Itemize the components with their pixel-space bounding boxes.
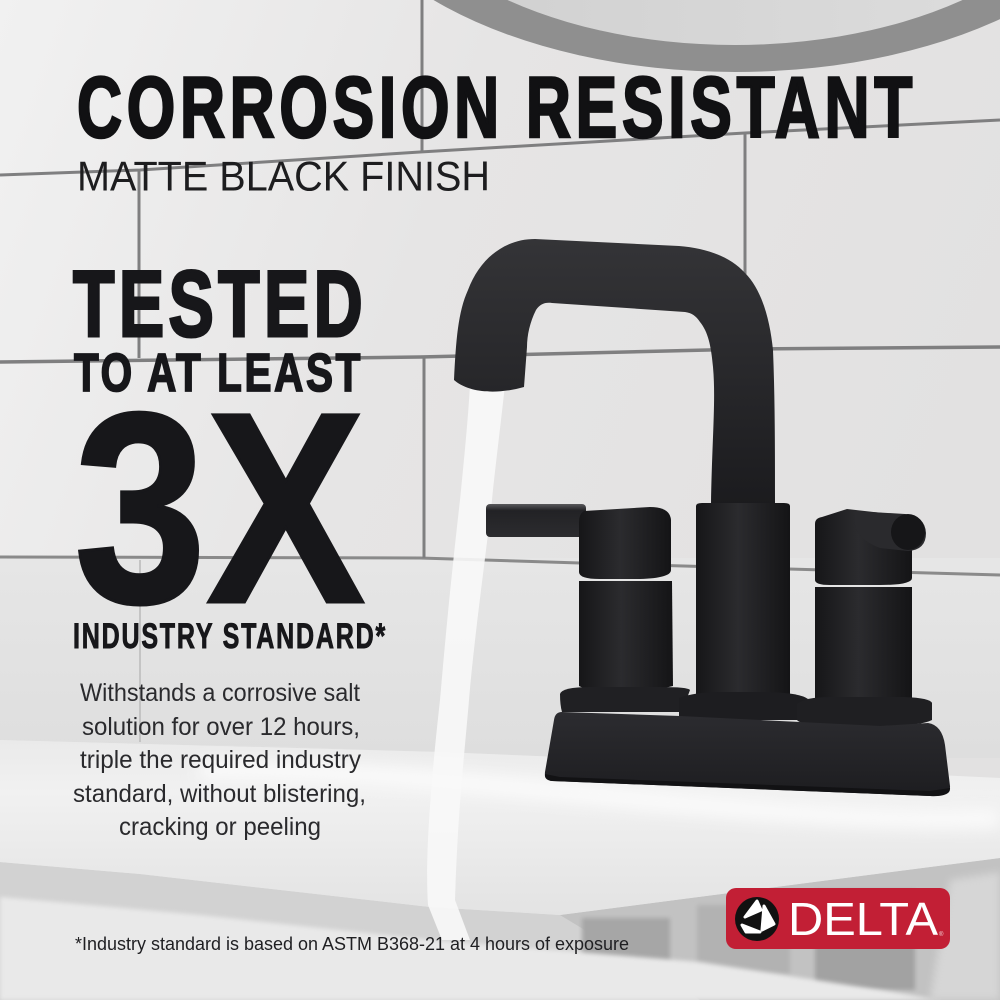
logo: Delta	[726, 888, 950, 949]
body text: triple the required industry	[80, 746, 361, 774]
water stream	[427, 385, 505, 940]
mirror	[326, 0, 1000, 72]
body text	[73, 679, 366, 841]
logo wordmark: DELTA	[788, 893, 938, 945]
sink	[0, 740, 1000, 1000]
icon: Delta emblem	[735, 897, 779, 941]
headline: 3X: 3X	[74, 356, 366, 660]
left handle	[486, 504, 690, 712]
body text: standard, without blistering,	[73, 780, 366, 808]
headline: to at least: TO AT LEAST	[74, 343, 363, 403]
right handle	[797, 509, 932, 726]
base plate	[545, 712, 950, 796]
footnote: *Industry standard is based on ASTM B368-21 at 4 hours of exposure	[75, 933, 629, 954]
centre column	[679, 503, 808, 720]
body text: cracking or peeling	[119, 813, 321, 841]
subtitle: MATTE BLACK FINISH	[77, 152, 490, 200]
spout	[454, 239, 775, 505]
registered mark: ®	[939, 931, 944, 938]
headline: industry standard: INDUSTRY STANDARD*	[73, 617, 387, 656]
body text: solution for over 12 hours,	[82, 713, 360, 741]
headline: tested: TESTED	[73, 251, 367, 356]
body text: Withstands a corrosive salt	[80, 679, 360, 707]
